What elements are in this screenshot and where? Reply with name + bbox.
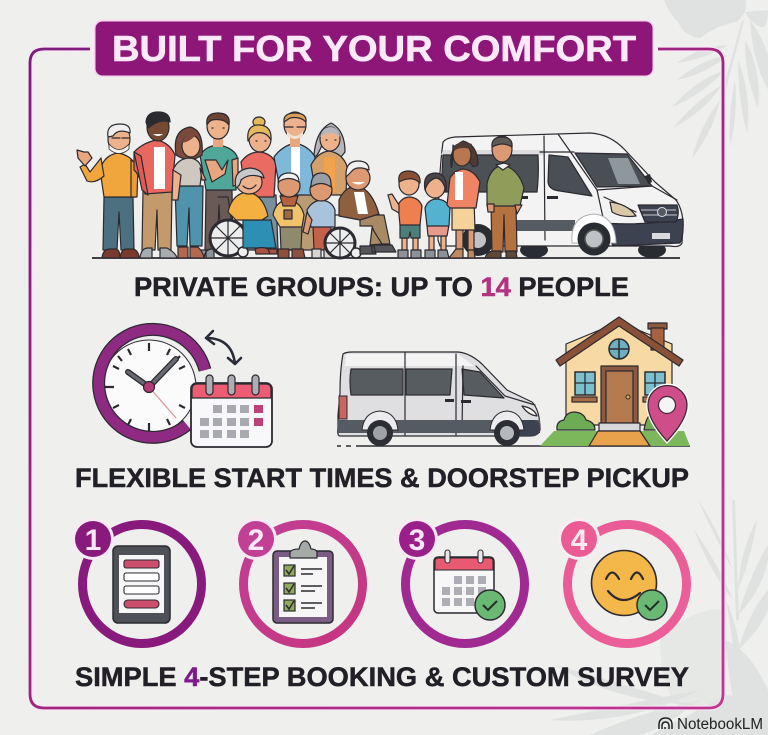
NotebookLM logo: NotebookLM bbox=[677, 716, 763, 733]
illustration: silver van bbox=[337, 352, 690, 446]
decorative palm leaves top right bbox=[664, 0, 768, 158]
illustration: large group of people beside van bbox=[77, 112, 683, 258]
ground line bbox=[92, 257, 680, 259]
illustration: house with map pin bbox=[540, 317, 690, 446]
icon: swap arrow bbox=[206, 331, 241, 364]
back row of adults bbox=[199, 112, 347, 258]
heading: private groups: PRIVATE GROUPS: UP TO 14 PEOPLE bbox=[134, 272, 629, 302]
step 2: clipboard: 2 bbox=[248, 524, 264, 557]
older man in scarf bbox=[273, 173, 305, 258]
woman in wheelchair bbox=[210, 168, 277, 257]
step 3: calendar check: 3 bbox=[409, 524, 425, 557]
step 1: tablet: 1 bbox=[85, 524, 101, 557]
van with group bbox=[438, 133, 683, 258]
man with glasses waving bbox=[77, 124, 139, 258]
man in olive sweater bbox=[485, 136, 524, 258]
heading: flexible start times: FLEXIBLE START TIMES & DOORSTEP PICKUP bbox=[75, 463, 689, 493]
title banner bbox=[94, 20, 654, 77]
step 2: clipboard bbox=[235, 518, 362, 644]
step 4: smiley: 4 bbox=[571, 524, 588, 557]
decorative palm leaves bottom right bbox=[550, 500, 768, 735]
woman in coral jacket bbox=[447, 141, 480, 258]
man in wheelchair bbox=[325, 161, 396, 258]
woman with jeans bbox=[172, 127, 206, 258]
man with red shirt bbox=[134, 112, 177, 258]
icon: clock bbox=[99, 329, 205, 437]
step 1: tablet bbox=[72, 518, 202, 644]
step 3: calendar check bbox=[396, 518, 524, 644]
boy in grey shirt bbox=[303, 173, 337, 258]
heading: simple booking: SIMPLE 4-STEP BOOKING & CUSTOM SURVEY bbox=[75, 662, 689, 692]
title banner: BUILT FOR YOUR COMFORT bbox=[112, 28, 636, 69]
step 4: smiley bbox=[558, 518, 686, 644]
boy in orange shirt bbox=[388, 171, 422, 258]
girl in blue shirt bbox=[424, 173, 450, 258]
icon: calendar bbox=[191, 375, 272, 447]
